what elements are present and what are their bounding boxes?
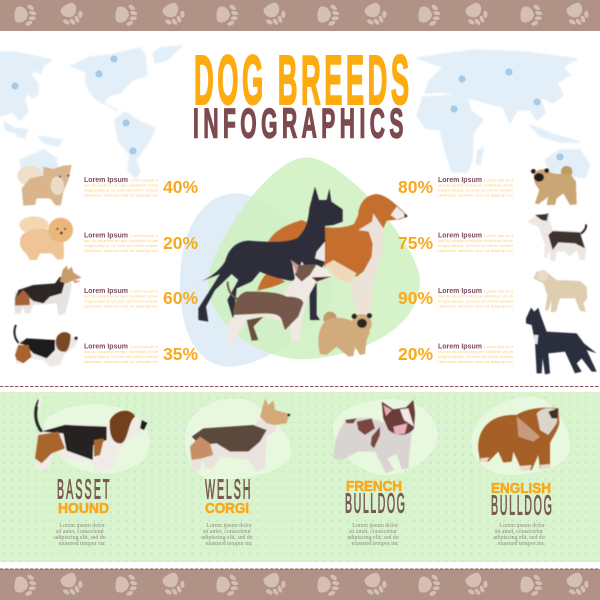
right text row 1: sed do eiusmod tempor incididunt ut lab [438,184,513,188]
left text row 1: magna aliqua. Ut enim ad minim veniam [84,188,158,192]
welsh corgi illustration [190,398,290,472]
right text row 1 [398,175,513,198]
left text row 4: sed do eiusmod tempor incididunt ut lab [84,350,158,354]
world maps [0,46,590,180]
french bulldog name: FRENCH [346,478,402,495]
right text row 2: sed do eiusmod tempor incididunt ut lab [438,239,513,243]
welsh corgi text: Lorem ipsum dolor [206,523,252,529]
borzoi [257,194,408,313]
left dog: chihuahua [17,165,72,206]
bottom paw band [0,569,600,600]
left text row 2: ullamco laboris nisi ut aliquip ex [84,249,158,253]
left dog: basset [14,325,78,367]
right text row 4: magna aliqua. Ut enim ad minim veniam [438,355,513,359]
central blobs [180,157,420,367]
panel: breed cards background [0,392,600,562]
right text row 2: Lorem Ipsum [438,230,482,240]
english bulldog text: eiusmod tempor inc [498,541,545,547]
pug [318,312,372,357]
top paw band [0,0,600,32]
left text row 3: 60% [163,288,198,308]
right text row 3: Lorem ipsum d [484,290,513,294]
basset hound text: adipiscing elit, sed do [54,535,106,541]
left text row 1: ullamco laboris nisi ut aliquip ex [84,194,158,198]
basset hound text: Lorem ipsum dolor [59,523,105,529]
english bulldog text [493,523,545,547]
right text row 1: Lorem Ipsum [438,175,482,184]
welsh corgi blob [185,399,292,480]
dane chest and paw [315,242,325,262]
left text row 4 [84,342,198,364]
right text row 4: sed do eiusmod tempor incididunt ut lab [438,350,513,354]
right text row 2: Lorem ipsum d [484,234,513,238]
right text row 3: ullamco laboris nisi ut aliquip ex [438,304,513,308]
right dog: pug [531,166,577,205]
left text row 1: Lorem ipsum d [130,178,158,182]
map location dots [11,55,564,161]
basset hound blob [43,404,150,473]
card: french bulldog [333,399,437,547]
right text row 2: 75% [398,233,433,253]
right text row 3 [398,286,513,308]
basset hound text [54,523,106,547]
french bulldog text: Lorem ipsum dolor [352,523,398,529]
right dog: great dane [526,308,597,374]
right text row 4: 20% [398,344,433,364]
english bulldog text: sit amet, consectetur [495,529,543,535]
french bulldog illustration [333,400,415,473]
english bulldog name: ENGLISH [491,480,551,497]
welsh corgi name: WELSH [205,475,252,505]
pit bull [227,260,332,343]
left text row 1: Lorem Ipsum [84,175,128,184]
left text row 2: magna aliqua. Ut enim ad minim veniam [84,244,158,248]
left text row 4: ullamco laboris nisi ut aliquip ex [84,360,158,364]
card: basset hound [35,398,150,547]
left text row 2: sed do eiusmod tempor incididunt ut lab [84,239,158,243]
left dog: pomeranian [19,216,73,260]
french bulldog name: BULLDOG [345,489,406,519]
basset hound text: eiusmod tempor inc [59,541,106,547]
left text row 1: sed do eiusmod tempor incididunt ut lab [84,184,158,188]
left text row 1: 40% [163,177,198,197]
french bulldog blob [333,399,437,475]
left text row 3: sed do eiusmod tempor incididunt ut lab [84,294,158,298]
title: DOG BREEDS [194,42,413,120]
right text row 1: magna aliqua. Ut enim ad minim veniam [438,188,513,192]
french bulldog text [347,523,399,547]
basset hound illustration [35,398,147,473]
welsh corgi text: eiusmod tempor inc [206,541,253,547]
english bulldog illustration [478,408,559,471]
french bulldog text: sit amet, consectetur [349,529,397,535]
english bulldog name: BULLDOG [491,491,554,521]
right dog: bull terrier [527,212,586,261]
english bulldog blob [472,397,570,475]
right text row 3: Lorem Ipsum [438,286,482,295]
welsh corgi name: CORGI [205,500,249,517]
left text row 3: magna aliqua. Ut enim ad minim veniam [84,300,158,304]
left text row 3: Lorem Ipsum [84,286,128,295]
card: welsh corgi [185,398,292,547]
right text row 2: magna aliqua. Ut enim ad minim veniam [438,244,513,248]
english bulldog text: Lorem ipsum dolor [499,523,545,529]
left dog: corgi [14,266,82,316]
left text row 2: Lorem Ipsum [84,230,128,240]
right text row 1: 80% [398,177,433,197]
english bulldog text: adipiscing elit, sed do [493,535,545,541]
great dane [198,187,343,322]
right text row 1: ullamco laboris nisi ut aliquip ex [438,194,513,198]
left text row 3: Lorem ipsum d [130,290,158,294]
right text row 1: Lorem ipsum d [484,178,513,182]
welsh corgi text [201,523,253,547]
left text row 2: Lorem ipsum d [130,234,158,238]
french bulldog text: adipiscing elit, sed do [347,535,399,541]
basset hound name: HOUND [58,500,109,517]
left text row 2 [84,230,198,253]
welsh corgi text: adipiscing elit, sed do [201,535,253,541]
right text row 2 [398,230,513,253]
left text row 3: ullamco laboris nisi ut aliquip ex [84,304,158,308]
right text row 4: ullamco laboris nisi ut aliquip ex [438,360,513,364]
card: english bulldog [472,397,570,547]
left text row 4: Lorem Ipsum [84,342,128,350]
right text row 3: magna aliqua. Ut enim ad minim veniam [438,300,513,304]
right text row 4: Lorem ipsum d [484,345,513,349]
right text row 4: Lorem Ipsum [438,342,482,350]
french bulldog text: eiusmod tempor inc [352,541,399,547]
left text row 2: 20% [163,233,198,253]
left text row 1 [84,175,198,198]
right text row 3: 90% [398,288,433,308]
right text row 2: ullamco laboris nisi ut aliquip ex [438,249,513,253]
left text row 4: magna aliqua. Ut enim ad minim veniam [84,355,158,359]
left text row 4: Lorem ipsum d [130,345,158,349]
title: INFOGRAPHICS [193,101,408,148]
left text row 3 [84,286,198,308]
central dogs illustration [198,187,408,357]
basset hound name: BASSET [57,475,112,505]
welsh corgi text: sit amet, consectetur [203,529,251,535]
right text row 4 [398,342,513,364]
right text row 3: sed do eiusmod tempor incididunt ut lab [438,294,513,298]
left text row 4: 35% [163,344,198,364]
right dog: labrador [533,270,587,312]
basset hound text: sit amet, consectetur [56,529,104,535]
